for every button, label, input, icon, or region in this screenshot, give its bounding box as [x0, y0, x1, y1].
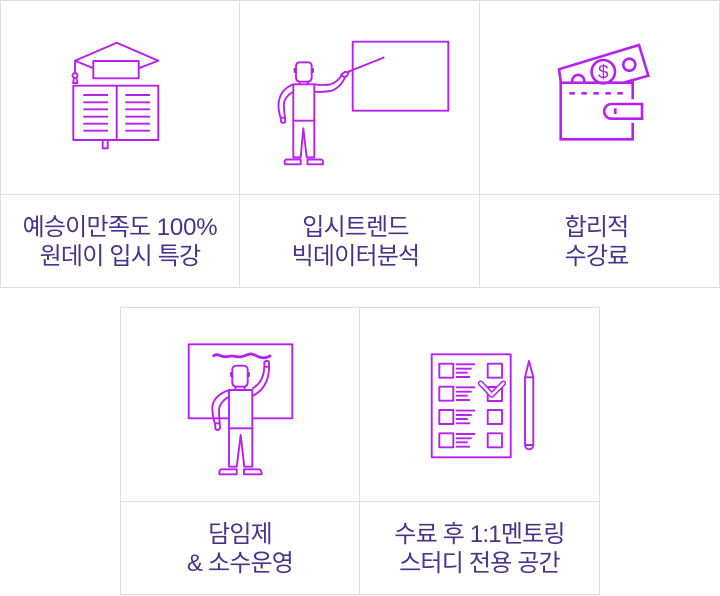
icon: wallet with banknote: [558, 43, 650, 141]
panel: homeroom and small groups: [120, 307, 360, 595]
panel: one-on-one mentoring after course: [359, 307, 600, 595]
caption: 수료 후 1:1멘토링: [394, 521, 565, 548]
caption: 담임제: [208, 521, 272, 548]
caption: & 소수운영: [187, 550, 293, 577]
caption: 입시트렌드: [302, 214, 409, 241]
dollar sign: $: [598, 62, 609, 84]
panel: admissions trend big data: [239, 0, 480, 288]
caption: 원데이 입시 특강: [40, 243, 200, 270]
icon: graduation cap on open book: [72, 42, 160, 150]
caption: 합리적: [565, 214, 628, 241]
caption: 수강료: [565, 243, 628, 270]
panel: reasonable tuition: [479, 0, 720, 288]
icon: teacher writing on board: [188, 343, 294, 476]
caption: [187, 521, 293, 577]
panel: satisfaction special lecture: [0, 0, 240, 288]
caption: [394, 521, 565, 577]
caption: 예승이만족도 100%: [23, 214, 217, 241]
caption: [292, 214, 419, 270]
caption: [565, 214, 628, 270]
caption: 스터디 전용 공간: [399, 550, 560, 577]
caption: 빅데이터분석: [292, 243, 419, 270]
icon: checklist and pencil: [430, 353, 534, 458]
caption: [23, 214, 217, 270]
icon: presenter pointing at board: [278, 40, 450, 166]
